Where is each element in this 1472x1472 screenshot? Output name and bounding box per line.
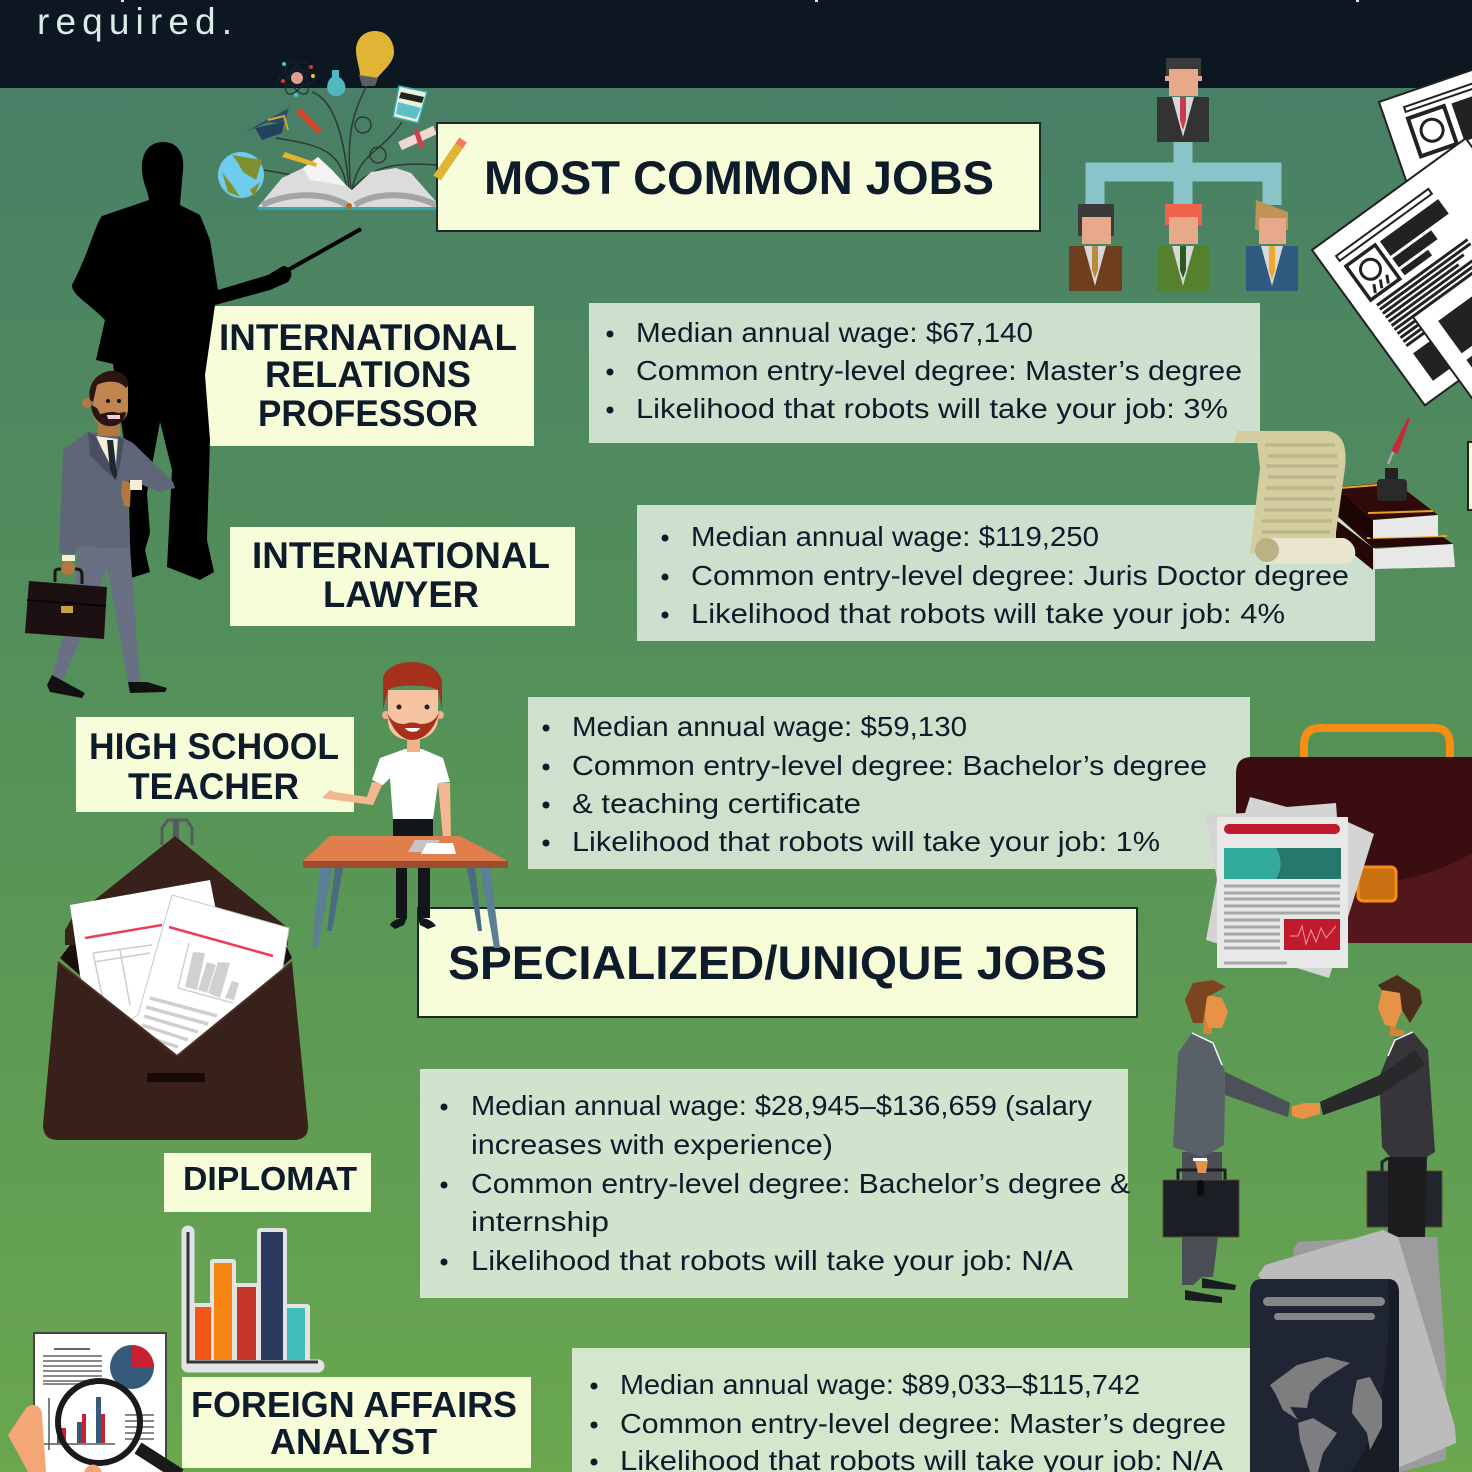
icon: teacher at desk xyxy=(303,662,508,948)
header band: required. xyxy=(37,1,232,42)
icon: businessman with briefcase xyxy=(25,371,175,698)
panel: diplomat facts: Likelihood that robots will take your job: N/A xyxy=(471,1245,1073,1276)
icon: report with magnifier xyxy=(8,1333,180,1472)
header band xyxy=(0,0,1472,88)
label: international relations professor: RELATIONS xyxy=(265,354,471,395)
panel: professor facts: Common entry-level degree: Master’s degree xyxy=(636,355,1242,386)
panel: diplomat facts: internship xyxy=(471,1206,609,1237)
label: international lawyer: INTERNATIONAL xyxy=(252,535,550,576)
panel: teacher facts: Median annual wage: $59,130 xyxy=(572,711,967,742)
panel: teacher facts: Common entry-level degree: Bachelor’s degree xyxy=(572,750,1207,781)
panel: teacher facts: & teaching certificate xyxy=(572,788,861,819)
panel: professor facts: Median annual wage: $67,140 xyxy=(636,317,1033,348)
label: high school teacher xyxy=(76,717,354,812)
icon: newspapers xyxy=(1312,47,1472,438)
panel: lawyer facts: Median annual wage: $119,250 xyxy=(691,521,1099,552)
label: foreign affairs analyst: FOREIGN AFFAIRS xyxy=(191,1384,517,1425)
panel: professor facts: Likelihood that robots will take your job: 3% xyxy=(636,393,1228,424)
label: foreign affairs analyst xyxy=(182,1377,531,1468)
panel: analyst facts: Median annual wage: $89,033–$115,742 xyxy=(620,1369,1140,1400)
title: specialized/unique jobs: SPECIALIZED/UNIQUE JOBS xyxy=(448,936,1107,989)
label: international relations professor: INTERNATIONAL xyxy=(219,317,517,358)
label: high school teacher: HIGH SCHOOL xyxy=(89,726,339,767)
panel: diplomat facts xyxy=(420,1069,1130,1298)
label: international lawyer: LAWYER xyxy=(323,574,479,615)
panel: teacher facts: Likelihood that robots will take your job: 1% xyxy=(572,826,1160,857)
panel: lawyer facts: Likelihood that robots will take your job: 4% xyxy=(691,598,1285,629)
panel: diplomat facts: increases with experience) xyxy=(471,1129,833,1160)
label: diplomat xyxy=(164,1153,371,1212)
label: diplomat: DIPLOMAT xyxy=(183,1160,357,1197)
icon: scroll and books with quill xyxy=(1234,418,1455,570)
label: international relations professor: PROFESSOR xyxy=(258,393,478,434)
panel: lawyer facts xyxy=(637,505,1375,641)
panel: analyst facts xyxy=(572,1348,1250,1472)
icon: silhouette professor xyxy=(72,142,361,580)
icon: open book with ideas xyxy=(218,31,442,210)
icon: bar chart xyxy=(188,1228,318,1366)
title: most common jobs: MOST COMMON JOBS xyxy=(484,151,994,204)
panel: diplomat facts: Median annual wage: $28,945–$136,659 (salary xyxy=(471,1090,1092,1121)
icon: handshake businessmen xyxy=(1163,975,1442,1303)
label: international relations professor xyxy=(200,306,534,446)
panel: diplomat facts: Common entry-level degree: Bachelor’s degree & xyxy=(471,1168,1130,1199)
icon: passport xyxy=(1250,1230,1456,1472)
icon: organisation chart xyxy=(1069,58,1298,291)
panel: analyst facts: Common entry-level degree: Master’s degree xyxy=(620,1408,1226,1439)
panel: lawyer facts: Common entry-level degree: Juris Doctor degree xyxy=(691,560,1349,591)
title: most common jobs xyxy=(437,123,1040,231)
title: specialized/unique jobs xyxy=(418,908,1137,1017)
icon: envelope with documents xyxy=(43,820,308,1140)
label: international lawyer xyxy=(230,527,575,626)
label: foreign affairs analyst: ANALYST xyxy=(270,1421,437,1462)
icon: small box edge right xyxy=(1468,442,1472,510)
panel: professor facts xyxy=(589,303,1260,443)
icon: pencil on title box xyxy=(437,140,463,178)
label: high school teacher: TEACHER xyxy=(128,766,299,807)
icon: right briefcase with report xyxy=(1206,728,1472,978)
panel: teacher facts xyxy=(528,697,1250,869)
